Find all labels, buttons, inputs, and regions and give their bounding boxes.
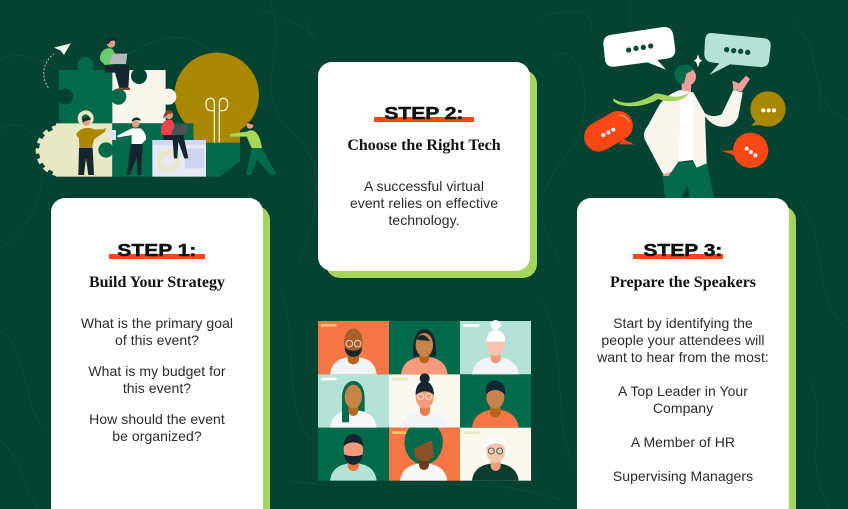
person in white shirt: [109, 118, 146, 175]
intro text: Start by identifying the: [613, 315, 753, 331]
speech bubble: white: [603, 27, 675, 70]
question text: of this event?: [115, 332, 199, 348]
participant 3: [472, 320, 519, 374]
question text: be organized?: [112, 428, 202, 444]
man with tie and jacket: [613, 65, 750, 198]
step label: STEP 1:: [117, 240, 196, 260]
speaker option: A Top Leader in Your: [618, 383, 748, 399]
tile backgrounds: [318, 321, 531, 481]
card shadow: [59, 206, 270, 509]
person on top with laptop: [100, 37, 130, 90]
speaker option: Company: [653, 400, 713, 416]
light bulb: [174, 53, 259, 177]
person in red with laptop: [161, 110, 188, 158]
intro text: [597, 315, 769, 365]
card shadow: [585, 206, 796, 509]
step underline: [109, 254, 205, 259]
speaker option: Supervising Managers: [613, 468, 753, 484]
participant 5: [401, 373, 448, 428]
question text: What is my budget for: [88, 363, 226, 379]
participant 2: [401, 329, 448, 374]
person in olive shirt: [76, 117, 106, 175]
speech bubble: red left: [579, 106, 638, 157]
speaker option: A Member of HR: [631, 434, 735, 450]
speech bubble: mint: [704, 33, 771, 75]
question text: [81, 315, 233, 348]
question text: What is the primary goal: [81, 315, 233, 331]
participant 8: [400, 428, 447, 481]
question text: [89, 411, 225, 444]
step label: STEP 2:: [384, 103, 463, 123]
step label: STEP 3:: [643, 240, 722, 260]
panel: step 1: [51, 198, 270, 509]
dashboard panel: [152, 140, 206, 177]
card shadow: [326, 70, 537, 278]
intro text: people your attendees will: [601, 332, 765, 348]
heading: Build Your Strategy: [89, 274, 225, 291]
card: [51, 198, 263, 509]
panel: step 3: [577, 198, 796, 509]
step underline: [633, 254, 723, 259]
panel: step 2: [318, 62, 537, 278]
puzzle pieces: [38, 57, 193, 177]
speaker option: [618, 383, 748, 416]
person pushing bulb: [229, 121, 276, 175]
intro text: want to hear from the most:: [597, 349, 769, 365]
participant 1: [330, 328, 377, 374]
participant 7: [330, 434, 377, 481]
description text: [350, 178, 498, 228]
speech bubble: olive: [750, 91, 786, 127]
card: [318, 62, 530, 271]
icon: paper plane: [44, 43, 71, 88]
step underline: [374, 117, 474, 122]
participant 6: [472, 381, 519, 428]
description text: event relies on effective: [350, 195, 498, 211]
speech bubble: red right: [722, 133, 768, 168]
description text: technology.: [388, 212, 460, 228]
question text: How should the event: [89, 411, 225, 427]
sparkle: [694, 54, 702, 68]
question text: [88, 363, 226, 396]
heading: Choose the Right Tech: [347, 137, 501, 154]
card: [577, 198, 789, 509]
question text: this event?: [123, 380, 191, 396]
participant 9: [472, 435, 519, 481]
description text: A successful virtual: [364, 178, 484, 194]
participant 4: [330, 381, 377, 428]
heading: Prepare the Speakers: [610, 274, 756, 291]
